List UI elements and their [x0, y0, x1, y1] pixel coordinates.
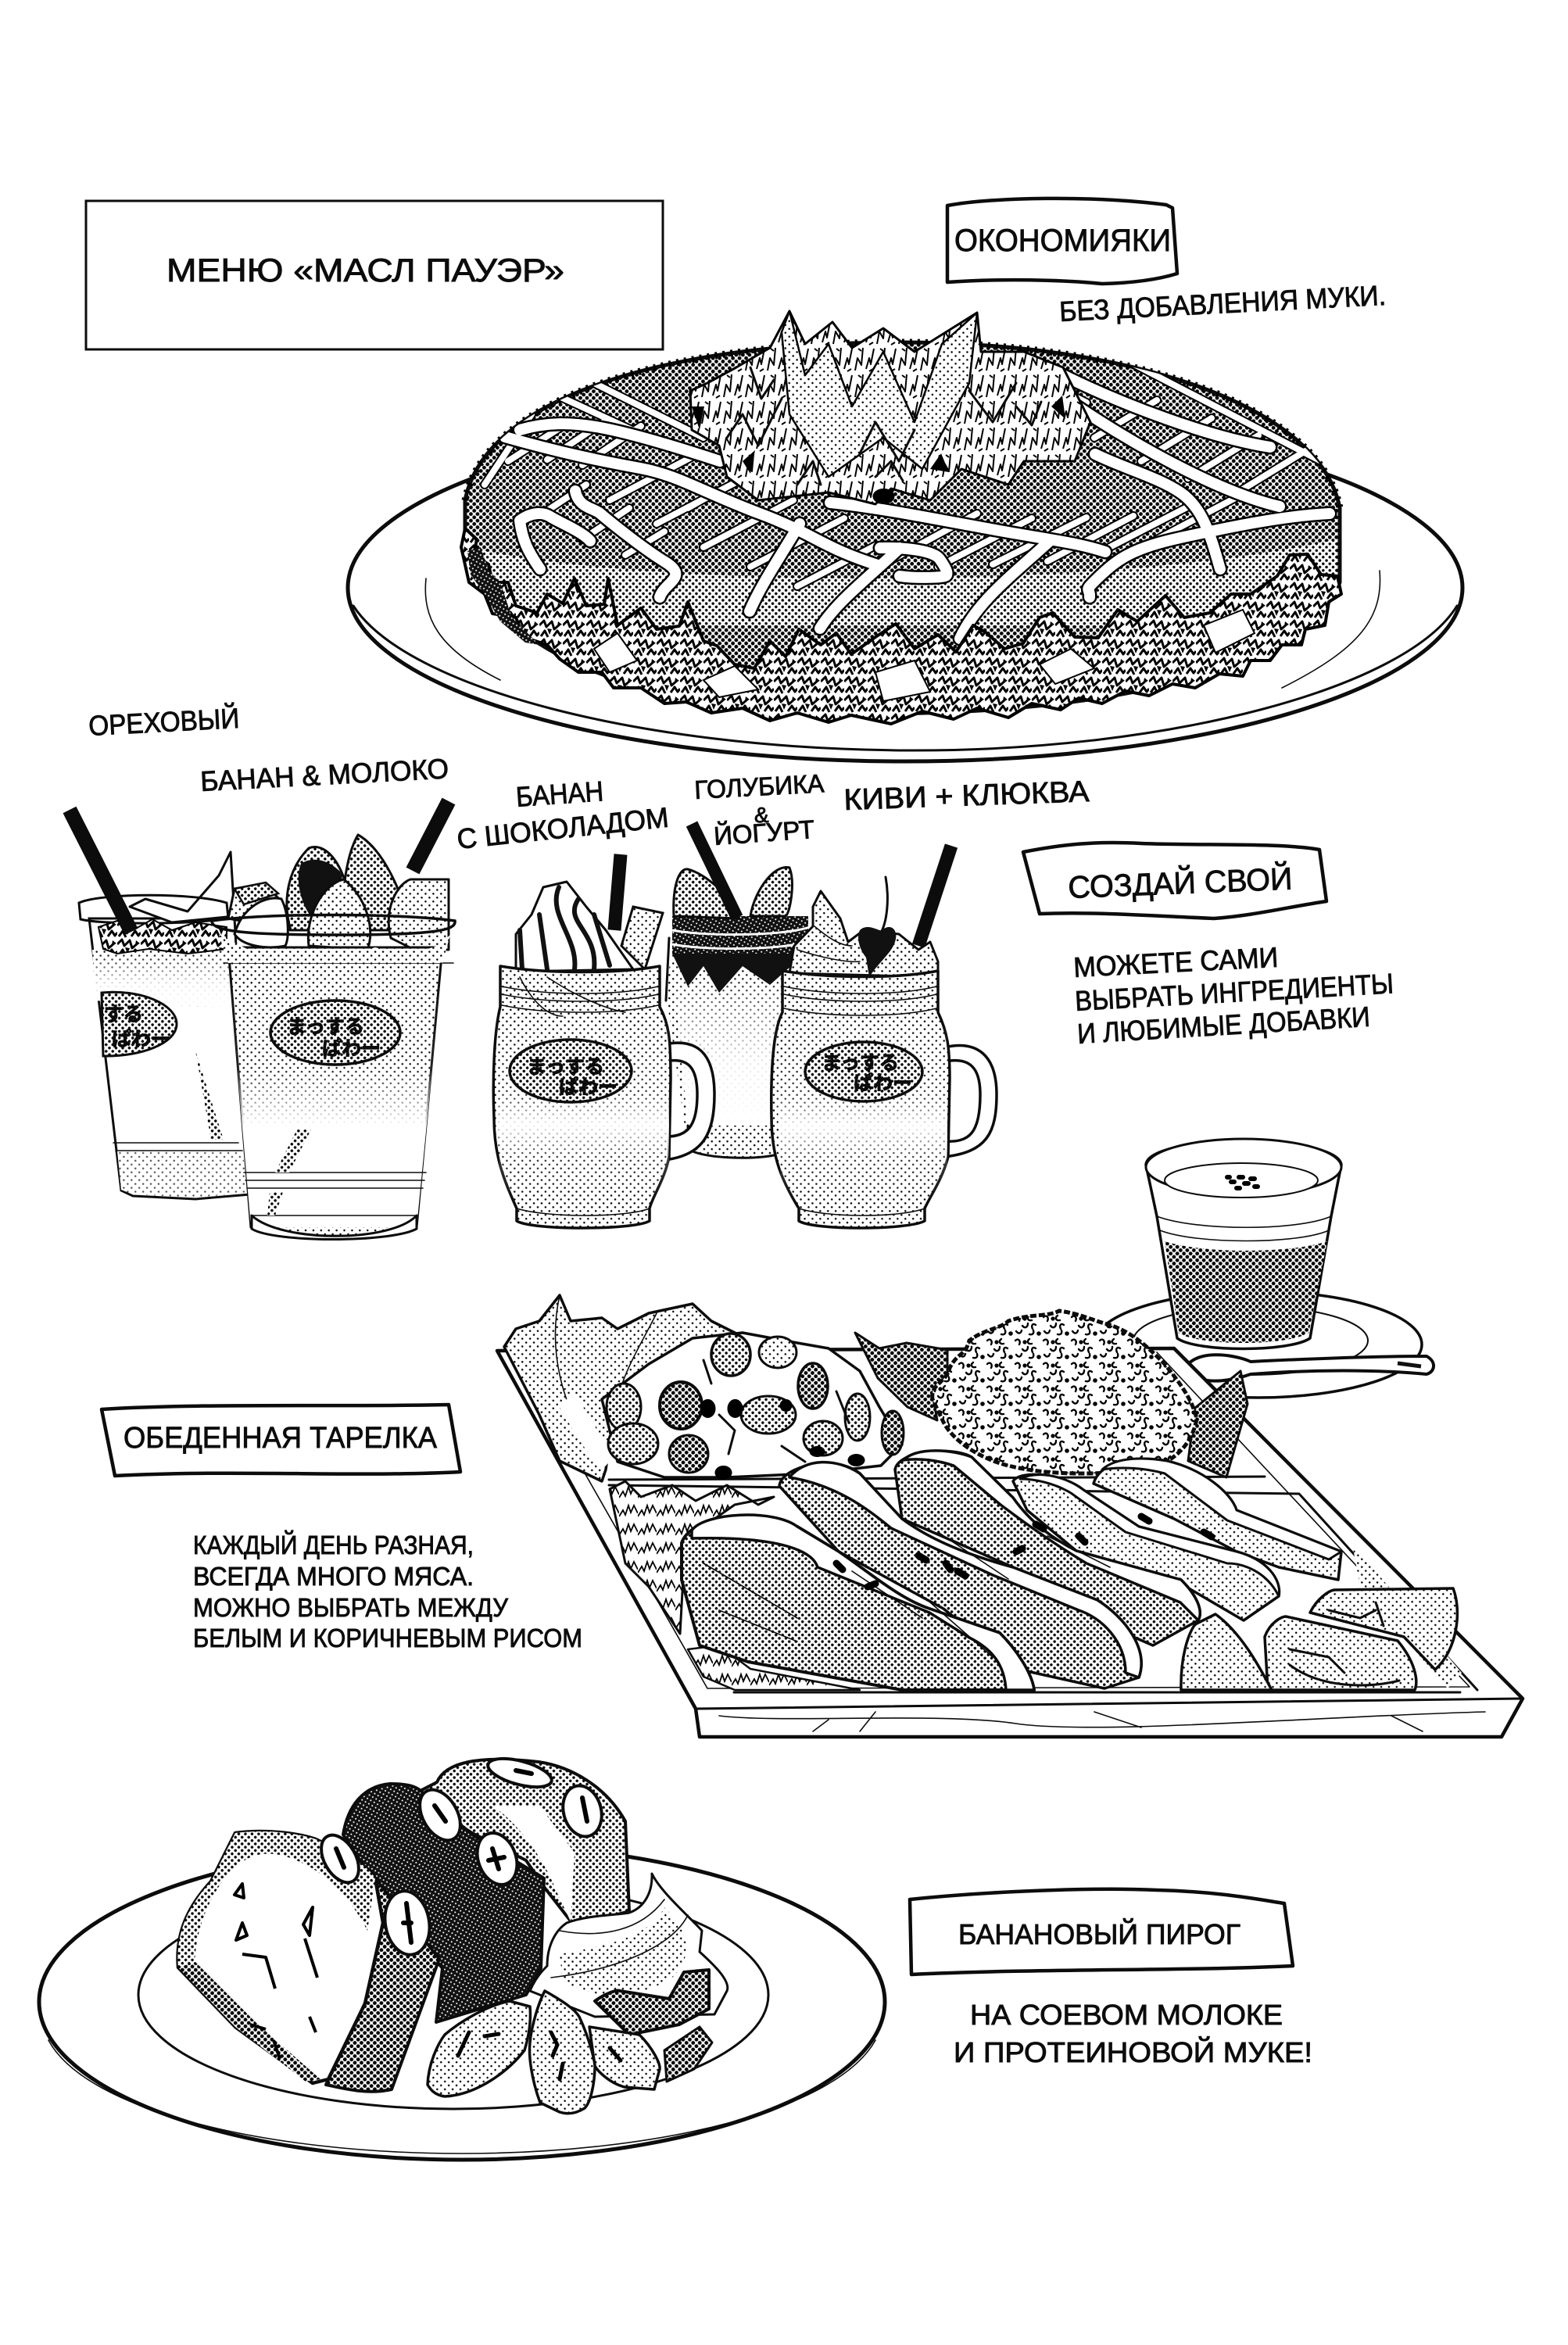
label: build your own — [1023, 843, 1326, 918]
text: banana cake note — [954, 1999, 1312, 2068]
lettuce — [504, 1295, 750, 1481]
handle — [664, 1043, 714, 1160]
tomato wedges — [1181, 1588, 1457, 1690]
drink label: blueberry and yogurt: ГОЛУБИКА — [693, 768, 825, 804]
drink label: nut: ОРЕХОВЫЙ — [88, 701, 240, 742]
straw — [614, 854, 621, 930]
drink: juice glass on saucer — [1094, 1139, 1434, 1398]
drink: nut cup — [70, 810, 250, 1199]
text: banana cake note: НА СОЕВОМ МОЛОКЕ — [970, 1999, 1283, 2031]
text: banana cake note: И ПРОТЕИНОВОЙ МУКЕ! — [954, 2035, 1312, 2068]
illustration: okonomiyaki on plate — [348, 311, 1462, 761]
shiso leaf right — [1188, 1371, 1248, 1477]
label: banana cake: БАНАНОВЫЙ ПИРОГ — [958, 1917, 1240, 1950]
cutlets — [682, 1451, 1341, 1690]
shredded greens — [610, 1481, 774, 1634]
logo: まっする — [287, 1016, 364, 1038]
cherry — [858, 927, 896, 977]
fruit topping — [228, 835, 449, 950]
logo: ぱわー — [854, 1072, 912, 1094]
nut crumble — [98, 919, 227, 954]
logo: ぱわー — [322, 1038, 381, 1060]
lower gloss tone — [469, 539, 1337, 625]
spoon — [1188, 1355, 1434, 1381]
logo — [510, 1040, 632, 1102]
mayonnaise lattice — [485, 352, 1330, 639]
text: lunch plate note: ВСЕГДА МНОГО МЯСА. — [193, 1562, 474, 1591]
saucer — [1094, 1291, 1422, 1398]
dark cake — [343, 1784, 544, 2022]
logo: まっする — [527, 1056, 604, 1078]
logo: ぱわー — [112, 1029, 170, 1051]
topping — [789, 891, 938, 977]
straw — [918, 846, 951, 946]
juice — [1165, 1241, 1327, 1343]
label: lunch plate — [102, 1405, 460, 1476]
tray — [497, 1348, 1523, 1737]
text: build your own note: И ЛЮБИМЫЕ ДОБАВКИ — [1076, 1001, 1371, 1050]
drink: kiwi cranberry jar — [771, 846, 997, 1228]
jar body — [771, 971, 950, 1228]
drink: banana chocolate jar — [493, 854, 714, 1228]
topping — [516, 882, 633, 972]
drink label: blueberry and yogurt: ЙОГУРТ — [713, 814, 815, 850]
straw — [413, 801, 449, 871]
glass — [1146, 1141, 1341, 1349]
drink: blueberry and yogurt glass — [666, 824, 813, 1158]
label: lunch plate: ОБЕДЕННАЯ ТАРЕЛКА — [124, 1422, 438, 1455]
dark left shadow — [467, 547, 539, 645]
drink: banana and milk cup — [212, 801, 455, 1240]
wafer — [621, 907, 663, 969]
label: okonomiyaki — [947, 199, 1177, 284]
handle — [944, 1046, 997, 1157]
text: lunch plate note: КАЖДЫЙ ДЕНЬ РАЗНАЯ, — [193, 1531, 474, 1559]
note: no flour: БЕЗ ДОБАВЛЕНИЯ МУКИ. — [1058, 279, 1387, 328]
whipped cream — [530, 1874, 728, 2017]
shiso leaf left — [855, 1333, 947, 1420]
drink label: banana with chocolate: БАНАН — [515, 775, 604, 813]
label: okonomiyaki: ОКОНОМИЯКИ — [954, 224, 1171, 258]
plate — [348, 414, 1462, 761]
drink label: banana with chocolate: С ШОКОЛАДОМ — [456, 801, 670, 855]
text: lunch plate note — [193, 1531, 582, 1652]
text: build your own note — [1072, 941, 1394, 1050]
manga menu page — [38, 197, 1524, 2162]
salad mix — [602, 1333, 904, 1480]
drink label: kiwi and cranberry: КИВИ + КЛЮКВА — [843, 775, 1090, 817]
illustration: lunch plate tray — [497, 1295, 1523, 1737]
serrated edge — [465, 342, 1340, 508]
title box — [86, 201, 663, 349]
drink label: blueberry and yogurt — [693, 768, 825, 850]
label: banana cake — [910, 1889, 1293, 1974]
pancake body — [465, 342, 1340, 714]
bonito flakes — [690, 311, 1090, 504]
logo — [270, 1001, 400, 1065]
fat caps — [692, 1515, 1034, 1690]
logo: ぱわー — [559, 1076, 618, 1098]
leaf — [595, 1970, 709, 2035]
rear cake — [413, 1760, 629, 1926]
logo: する — [104, 1004, 143, 1026]
jar body — [493, 966, 671, 1228]
batter flakes skirt — [461, 528, 1341, 724]
text: lunch plate note: БЕЛЫМ И КОРИЧНЕВЫМ РИСОМ — [193, 1624, 582, 1652]
text: build your own note: МОЖЕТЕ САМИ — [1072, 941, 1279, 983]
rice ball — [933, 1311, 1197, 1473]
logo — [805, 1042, 922, 1101]
logo — [102, 992, 177, 1056]
cup body — [228, 947, 442, 1236]
front slice — [177, 1831, 383, 2083]
text: lunch plate note: МОЖНО ВЫБРАТЬ МЕЖДУ — [193, 1593, 509, 1622]
straw — [70, 810, 131, 932]
label: build your own: СОЗДАЙ СВОЙ — [1068, 861, 1293, 905]
white batter patches — [594, 610, 1255, 701]
drink label: blueberry and yogurt: & — [754, 803, 769, 827]
logo: まっする — [822, 1052, 899, 1074]
cherry stem — [880, 877, 887, 934]
drink label: banana with chocolate — [456, 775, 670, 855]
banana pieces — [428, 1991, 712, 2114]
front slice side — [326, 1878, 439, 2092]
straw — [692, 824, 737, 918]
title text: МЕНЮ «МАСЛ ПАУЭР» — [166, 252, 564, 288]
banana slices — [313, 1753, 607, 1958]
plate — [39, 1844, 885, 2160]
drink label: banana and milk: БАНАН & МОЛОКО — [199, 752, 449, 797]
illustration: banana cake on plate — [39, 1753, 885, 2160]
text: build your own note: ВЫБРАТЬ ИНГРЕДИЕНТЫ — [1074, 967, 1394, 1017]
